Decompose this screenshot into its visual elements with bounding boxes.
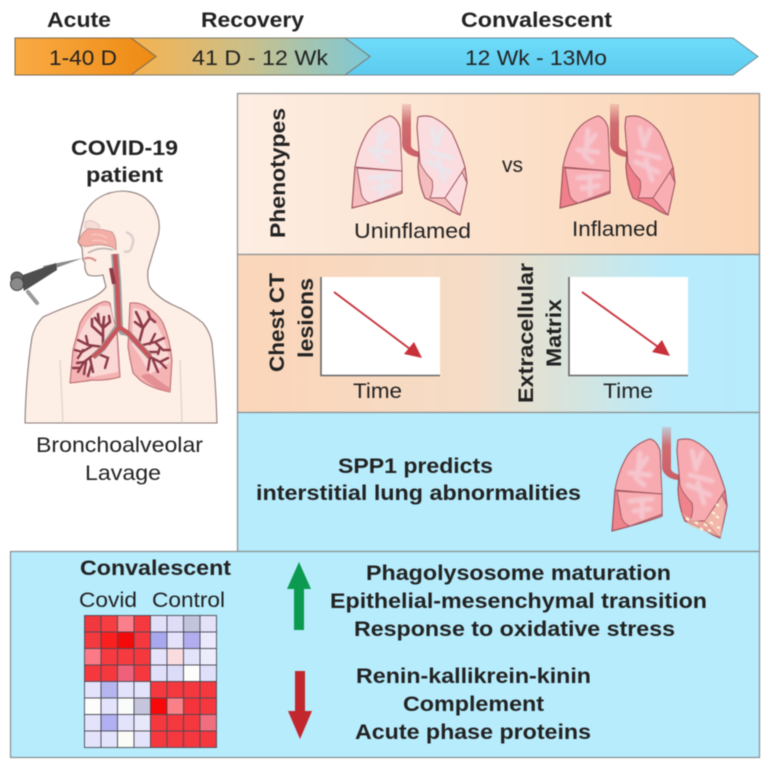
downregulated pathways: Renin-kallikrein-kinin — [356, 665, 591, 688]
heatmap column labels: Covid — [79, 589, 137, 612]
stage: acute — [15, 38, 156, 75]
patient heading: patient — [86, 164, 163, 187]
arrow: up (green) — [287, 562, 311, 630]
label: uninflamed: Uninflamed — [354, 220, 471, 243]
text: SPP1 predicts: SPP1 predicts — [338, 455, 493, 478]
icon: inflamed lungs — [560, 104, 675, 215]
patient caption — [36, 434, 203, 485]
upregulated pathways: Phagolysosome maturation — [366, 562, 671, 585]
x label: time: Time — [353, 380, 402, 403]
downregulated pathways: Acute phase proteins — [355, 721, 591, 744]
label: vs: vs — [502, 154, 523, 177]
patient heading — [71, 137, 178, 187]
y label: extracellular matrix: Extracellular — [515, 263, 538, 403]
label: inflamed: Inflamed — [572, 218, 658, 241]
body outline — [25, 191, 217, 423]
right lung — [128, 303, 172, 392]
patient heading: COVID-19 — [71, 137, 178, 160]
nasal cavity — [78, 229, 116, 250]
arrow: down (red) — [288, 671, 312, 739]
icon: lungs with fibrosis — [612, 427, 727, 538]
y label: chest CT lesions — [266, 273, 318, 372]
panel: phenotypes — [238, 94, 760, 254]
panel: SPP1 prediction — [238, 412, 760, 552]
x label: time: Time — [603, 380, 653, 403]
upregulated pathways — [330, 562, 707, 641]
timeline headings — [47, 9, 612, 32]
panel heading: Phenotypes — [267, 108, 290, 238]
bronchoscope — [10, 258, 83, 303]
y label: chest CT lesions: Chest CT — [266, 273, 289, 372]
text: SPP1 predicts — [256, 455, 581, 505]
illustration: patient with bronchoscope — [10, 191, 217, 423]
timeline arrow — [15, 38, 758, 75]
patient caption: Bronchoalveolar — [36, 434, 203, 457]
trachea and main bronchi — [93, 254, 150, 357]
stage: convalescent — [345, 38, 758, 75]
y label: extracellular matrix: Matrix — [543, 299, 566, 367]
text: SPP1 predicts: interstitial lung abnormalities — [256, 482, 581, 505]
upregulated pathways: Epithelial-mesenchymal transition — [330, 590, 707, 613]
heatmap — [84, 616, 216, 748]
stage: convalescent: 12 Wk - 13Mo — [465, 47, 607, 70]
y label: chest CT lesions: lesions — [295, 278, 318, 358]
stage: acute: 1-40 D — [49, 47, 117, 70]
heatmap column labels — [79, 589, 225, 612]
icon: uninflamed lungs — [352, 104, 467, 215]
upregulated pathways: Response to oxidative stress — [354, 618, 675, 641]
stage: recovery — [131, 38, 370, 75]
heatmap title: Convalescent — [80, 557, 231, 580]
y label: extracellular matrix — [515, 263, 566, 403]
panel: convalescent gene signatures — [10, 552, 760, 758]
timeline headings: Recovery — [201, 9, 304, 32]
sinus — [85, 221, 100, 230]
downregulated pathways: Complement — [403, 693, 544, 716]
timeline headings: Acute — [47, 9, 111, 32]
timeline headings: Convalescent — [461, 9, 612, 32]
chart: chest CT lesions over time — [321, 277, 440, 376]
patient caption: Lavage — [85, 462, 161, 485]
panel: time-course charts — [238, 254, 760, 412]
stage: recovery: 41 D - 12 Wk — [192, 47, 329, 70]
bronchial tree — [73, 312, 170, 376]
downregulated pathways — [355, 665, 591, 744]
heatmap column labels: Control — [152, 589, 225, 612]
chart: extracellular matrix over time — [569, 277, 688, 376]
left lung — [70, 302, 120, 383]
